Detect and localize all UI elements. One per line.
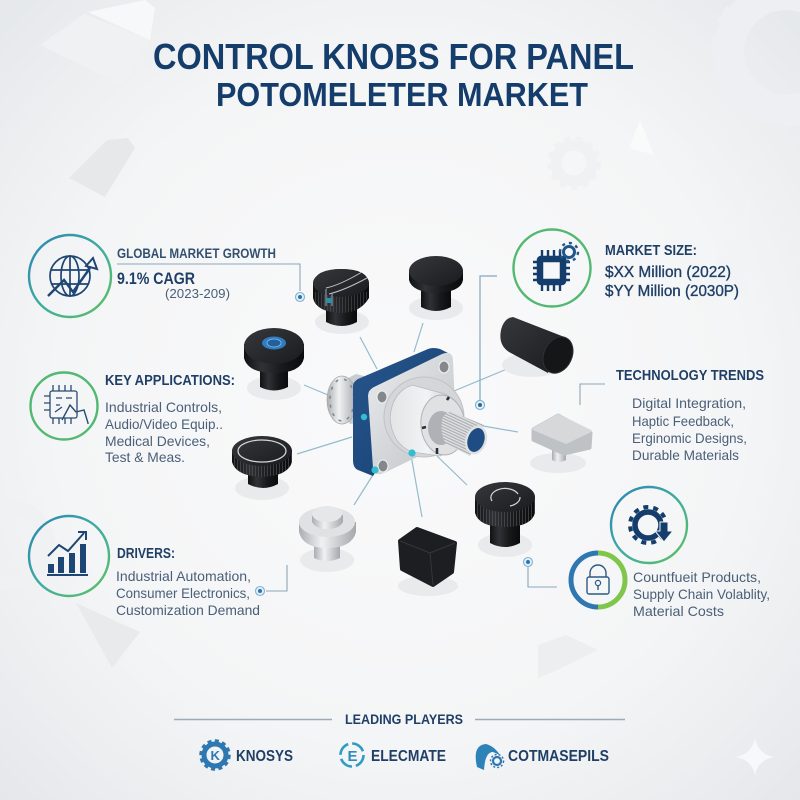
list: Durable Materials <box>632 447 739 463</box>
list: Customization Demand <box>116 602 260 618</box>
list: Audio/Video Equip.. <box>105 416 223 432</box>
list: Material Costs <box>633 603 724 619</box>
icon: globe with growth arrow <box>29 235 111 317</box>
knob: cylinder <box>500 317 579 378</box>
panel: technology trends <box>580 368 764 463</box>
panel: drivers <box>29 516 287 618</box>
knob: black cube <box>398 529 458 596</box>
list: Countfueit Products, <box>633 569 761 585</box>
values: $YY Million (2030P) <box>605 283 739 300</box>
title: POTOMELETER MARKET <box>216 76 588 113</box>
logo: elecmate: E <box>348 748 358 765</box>
heading: KEY APPLICATIONS: <box>105 372 235 389</box>
CAGR value: 9.1% CAGR <box>117 269 195 288</box>
values <box>605 264 739 300</box>
knob: blue cap <box>244 328 304 400</box>
blue housing <box>353 348 450 476</box>
list <box>633 569 770 619</box>
CAGR period: (2023-209) <box>165 286 230 301</box>
logo: elecmate: ELECMATE <box>371 748 446 765</box>
connector <box>524 558 557 587</box>
heading rules <box>174 718 625 720</box>
knurled shaft <box>442 412 484 456</box>
knob: dial marks <box>475 482 535 557</box>
logo: knosys: KNOSYS <box>236 748 293 765</box>
list <box>632 395 747 463</box>
shaft blue cap <box>463 424 489 456</box>
heading: GLOBAL MARKET GROWTH <box>117 246 276 261</box>
shaft body <box>390 385 468 457</box>
panel: global market growth <box>29 235 304 317</box>
list: Medical Devices, <box>105 433 210 449</box>
title: CONTROL KNOBS FOR PANEL <box>153 36 634 77</box>
list: Test & Meas. <box>105 449 185 465</box>
back flange <box>327 374 372 424</box>
logo: cotmasepils: COTMASEPILS <box>508 748 609 765</box>
list <box>105 399 223 465</box>
silver mounting plate <box>368 353 456 474</box>
panel: leading players <box>174 712 625 770</box>
list: Digital Integration, <box>632 395 746 411</box>
knob: silver square <box>530 415 591 473</box>
connector <box>256 565 287 596</box>
connector lines around the potentiometer <box>297 276 518 517</box>
logo: knosys: K <box>210 748 220 763</box>
heading: TECHNOLOGY TRENDS <box>616 368 764 384</box>
heading: MARKET SIZE: <box>605 242 697 259</box>
panel: market size <box>514 230 739 306</box>
list: Haptic Feedback, <box>632 413 734 429</box>
knob: plain <box>409 256 463 320</box>
icon: chip and hand <box>30 372 98 440</box>
connector <box>117 264 304 302</box>
heading: LEADING PLAYERS <box>345 712 463 727</box>
values: $XX Million (2022) <box>605 264 731 281</box>
mounting holes <box>377 361 449 472</box>
icon: padlock <box>571 553 625 607</box>
panel: key applications <box>30 372 235 465</box>
central potentiometer <box>327 348 489 476</box>
list <box>116 568 260 618</box>
list: Industrial Controls, <box>105 399 222 415</box>
knob: silver push <box>299 506 356 572</box>
cyan markers <box>361 414 416 474</box>
list: Erginomic Designs, <box>632 430 747 446</box>
list: Industrial Automation, <box>116 568 251 584</box>
panel: challenges <box>524 487 770 619</box>
list: Consumer Electronics, <box>116 585 250 601</box>
knob: striped <box>313 269 369 334</box>
logo: cotmasepils <box>476 744 609 770</box>
heading: DRIVERS: <box>117 546 175 562</box>
icon: bar chart with arrow <box>29 516 109 596</box>
list: Supply Chain Volablity, <box>633 586 770 602</box>
flange ring <box>384 377 464 457</box>
title <box>153 36 634 113</box>
connector <box>580 384 605 405</box>
logo: elecmate <box>340 744 446 766</box>
logo: knosys <box>201 741 293 769</box>
icon: chip and gear <box>514 230 590 306</box>
knob: ring top <box>232 436 292 500</box>
icon: gear with down arrow <box>611 487 687 563</box>
